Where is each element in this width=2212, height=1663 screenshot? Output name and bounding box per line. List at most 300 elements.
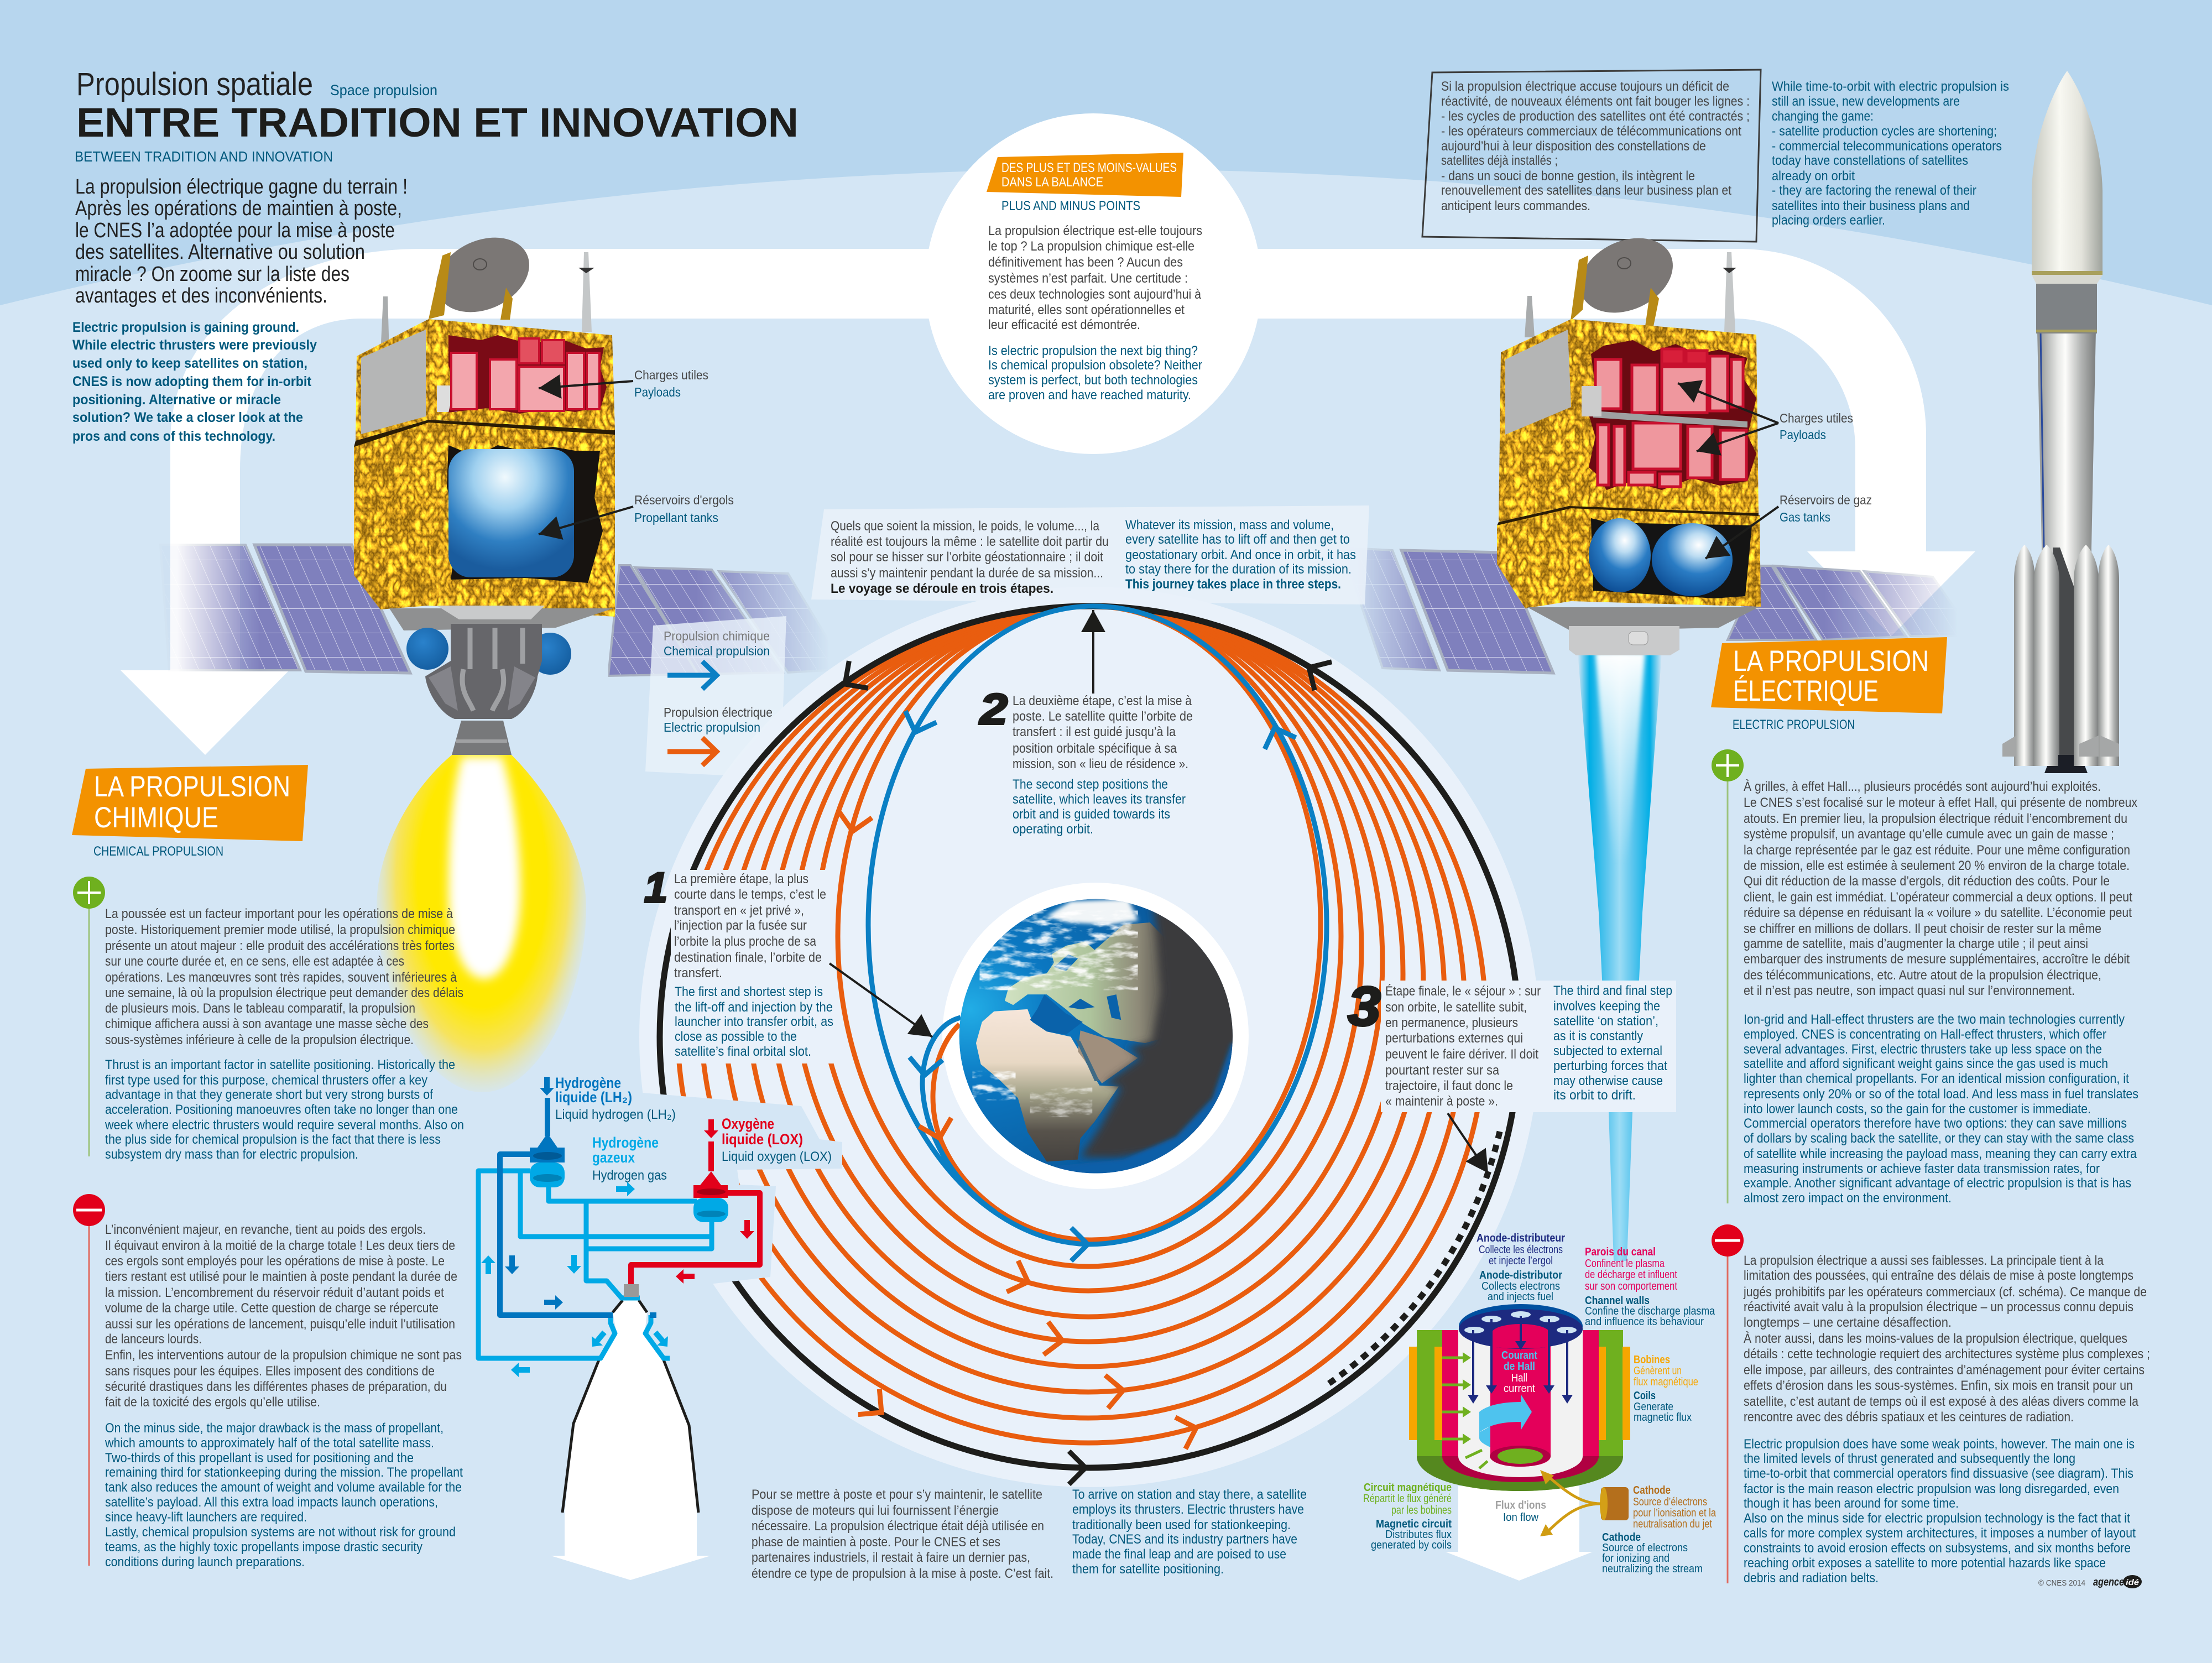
heading: title block: Space propulsion (330, 82, 437, 98)
label: electric satellite parts: Payloads (1780, 428, 1826, 442)
satellite dish (1568, 224, 1685, 327)
text: step 1: transport en « jet privé », (674, 903, 804, 918)
text: electric plus french: Qui dit réduction de la masse d’ergols, dit réduction des coûts. Pour le (1744, 874, 2110, 889)
magnetic flux arrows (1442, 1352, 1488, 1468)
legend arrow orange (667, 738, 717, 765)
icon: chemical minus (73, 1194, 105, 1566)
text: intro english (72, 320, 317, 444)
text: electric minus english: factor is the main reason electric propulsion was long disregarded, even (1744, 1482, 2119, 1497)
satellite antennas (380, 296, 389, 354)
ion flow white arrow (1446, 1486, 1593, 1581)
text: electric minus french: effets d’érosion dans les sous-systèmes. Enfin, six mois en transit pour un (1744, 1378, 2133, 1393)
text: intro french: des satellites. Alternative ou solution (75, 241, 365, 264)
text: orbit intro french: Le voyage se déroule en trois étapes. (831, 581, 1053, 596)
diagram: cryogenic engine feed schematic (478, 1075, 842, 1580)
night side (1081, 901, 1248, 1158)
geostationary orbit black (660, 606, 1519, 1468)
text: step 1: transfert. (674, 966, 722, 981)
label: hydrogen gas: gazeux (592, 1149, 635, 1166)
text: bottom french: Pour se mettre à poste et pour s’y maintenir, le satellite (752, 1487, 1042, 1502)
text: chemical plus french: sur une courte durée et, en ce sens, elle est adaptée à ces (105, 954, 404, 969)
chart: electric thruster plume (1578, 653, 1662, 1261)
text: bottom english: To arrive on station and stay there, a satellite (1072, 1487, 1307, 1502)
station-keeping dotted orbit (1328, 1132, 1500, 1384)
background: darker sky cap above the curve (0, 0, 2212, 305)
text: step 2: orbit and is guided towards its (1013, 807, 1170, 822)
label: chemical arrows (539, 381, 633, 534)
label: liquid oxygen: Oxygène (722, 1115, 774, 1132)
text: electric minus french: limitation des poussées, qui entraîne des délais de mise à poste longtemps (1744, 1268, 2133, 1283)
text: step 1: the lift-off and injection by the (675, 1000, 833, 1015)
label: chemical satellite parts (634, 368, 734, 525)
text: intro french: Après les opérations de maintien à poste, (75, 197, 402, 220)
label: channel walls: Parois du canal (1585, 1246, 1656, 1258)
heading: chemical propulsion banner: CHEMICAL PROPULSION (93, 844, 223, 859)
text: chemical minus english: teams, as the highly toxic propellants impose drastic security (105, 1540, 422, 1555)
satellite: chemical solar wings (160, 545, 846, 676)
label: cathode: pour l’ionisation et la (1633, 1507, 1717, 1519)
label: electric satellite parts (1780, 411, 1872, 524)
text: development english: today have constellations of satellites (1772, 153, 1968, 168)
grey radiator (361, 330, 426, 434)
text: step 1: satellite’s final orbital slot. (675, 1044, 811, 1059)
text: intro english: pros and cons of this technology. (72, 429, 275, 444)
label: anode distributor: and injects fuel (1488, 1291, 1553, 1303)
label: Hall current: Courant (1501, 1349, 1537, 1362)
text: orbit intro french: aussi s’y maintenir pendant la durée de sa mission... (831, 566, 1103, 581)
label: anode distributor (1477, 1232, 1565, 1303)
label: ion flow (1495, 1499, 1546, 1524)
label: chemical satellite parts: Propellant tanks (634, 510, 718, 525)
label: magnetic circuit: generated by coils (1371, 1539, 1452, 1551)
text: electric plus french: Le CNES s’est focalisé sur le moteur à effet Hall, qui présente de nombreux (1744, 795, 2137, 810)
label: channel walls: Channel walls (1585, 1295, 1650, 1307)
text: electric plus english: Commercial operators therefore have two options: they can save millions (1744, 1116, 2127, 1131)
text: electric plus french: réduire sa dépense en réduisant la « voilure » du satellite. L’économie peut (1744, 905, 2132, 920)
flow arrows (481, 1077, 754, 1377)
label: magnetic circuit: par les bobines (1391, 1504, 1452, 1516)
icon: chemical plus (73, 877, 105, 1156)
callout box: development french: aujourd’hui à leur disposition des constellations de (1441, 139, 1706, 154)
text: chemical minus english: Two-thirds of this propellant is used for positioning and the (105, 1451, 414, 1466)
text: chemical minus french: Il équivaut environ à la moitié de la charge totale ! Les deux tiers de (105, 1238, 455, 1253)
text: plus and minus english (988, 343, 1202, 403)
text: electric plus french: la charge représentée par le gaz est réduite. Pour une même configuration (1744, 843, 2130, 858)
label: cathode: Cathode (1602, 1531, 1641, 1544)
callout box: development french: réactivité, de nouveaux éléments ont fait bouger les lignes : (1441, 94, 1750, 109)
label: chemical satellite parts: Payloads (634, 385, 681, 399)
text: orbit intro english: This journey takes place in three steps. (1125, 577, 1341, 592)
scandinavia and europe and asia (1005, 922, 1167, 1043)
text: bottom english: them for satellite positioning. (1072, 1562, 1224, 1577)
text: step 1: destination finale, l’orbite de (674, 950, 822, 965)
text: electric minus english: time-to-orbit that commercial operators find dissuasive (see diagram). This (1744, 1466, 2133, 1481)
text: development english: - satellite production cycles are shortening; (1772, 124, 1997, 139)
channel interior (1458, 1330, 1583, 1477)
label: cathode: neutralisation du jet (1633, 1518, 1712, 1530)
gold upper bus (1499, 319, 1759, 522)
text: step 1: courte dans le temps, c’est le (674, 887, 826, 902)
text: intro english: While electric thrusters were previously (72, 337, 317, 353)
payload bay (1589, 340, 1756, 490)
oxygen turbopump (693, 1171, 728, 1222)
text: bottom english: traditionally been used for stationkeeping. (1072, 1518, 1291, 1532)
thruster base (1527, 607, 1759, 631)
panel: earth halo (942, 883, 1249, 1189)
heading: title block: BETWEEN TRADITION AND INNOVATION (75, 148, 333, 165)
text: orbit intro english (1125, 518, 1356, 592)
text: bottom french: dispose de moteurs qui lui fournissent l’énergie (752, 1503, 999, 1518)
text: step 3: may otherwise cause (1553, 1073, 1663, 1088)
gold upper bus (356, 319, 615, 441)
heading: title block (75, 66, 799, 165)
arrow: step 3 to dotted orbit (1448, 1113, 1488, 1173)
label: magnetic circuit: Circuit magnétique (1364, 1482, 1452, 1494)
propellant tank bay (447, 445, 603, 583)
text: intro french (75, 175, 408, 307)
text: intro french: avantages et des inconvénients. (75, 284, 327, 307)
text: chemical plus french: sous-systèmes inférieure à celle de la propulsion électrique. (105, 1033, 414, 1047)
label: channel walls: sur son comportement (1585, 1280, 1677, 1292)
text: step 2: The second step positions the (1013, 777, 1168, 792)
text: step 2: transfert : il est guidé jusqu’à la (1013, 724, 1176, 739)
heading: electric propulsion banner: LA PROPULSION (1733, 645, 1929, 677)
panel: orbit pale disc (639, 587, 1540, 1487)
text: electric minus french: longtemps – une certaine désaffection. (1744, 1315, 1952, 1330)
text: chemical plus english: the plus side for chemical propulsion is the fact that there is less (105, 1132, 441, 1147)
label: channel walls: and influence its behaviour (1585, 1316, 1704, 1328)
text: step 3: pourtant rester sur sa (1385, 1063, 1500, 1078)
label: coils: flux magnétique (1634, 1376, 1698, 1388)
text: bottom french: nécessaire. La propulsion électrique était déjà utilisée en (752, 1519, 1044, 1534)
label: liquid hydrogen: Liquid hydrogen (LH₂) (555, 1107, 676, 1122)
label: liquid oxygen: Liquid oxygen (LOX) (722, 1149, 832, 1164)
text: chemical plus english: subsystem dry mass than for electric propulsion. (105, 1147, 358, 1162)
text: development english (1772, 79, 2009, 228)
label: Hall current: Hall (1511, 1372, 1527, 1384)
credits: CNES and agency: © CNES 2014 (2038, 1578, 2085, 1588)
text: chemical minus french: la mission. L’encombrement du réservoir réduit d’autant poids et (105, 1285, 444, 1300)
text: plus and minus english: Is chemical propulsion obsolete? Neither (988, 358, 1202, 373)
label: chemical satellite parts: Charges utiles (634, 368, 708, 382)
shelf (1593, 411, 1747, 428)
text: plus and minus french: le top ? La propulsion chimique est-elle (988, 239, 1194, 254)
satellite: electric propulsion cutaway (1497, 224, 1761, 655)
panel: propulsion legend: Chemical propulsion (664, 644, 770, 658)
heading: chemical propulsion banner: LA PROPULSION (94, 770, 290, 803)
electric orbit ellipses (677, 606, 1486, 1443)
satellite: electric left wing (1342, 548, 1553, 673)
heading: title block: Propulsion spatiale (76, 66, 313, 102)
rocket boosters (2014, 545, 2035, 766)
liquid oxygen pipes (631, 1141, 760, 1293)
text: step 3: 3 (1348, 976, 1381, 1038)
icon: electric minus (1712, 1224, 1744, 1583)
text: electric plus french: et il n’est pas neutre, son impact quasi nul sur l’environnement. (1744, 983, 2075, 998)
text: chemical minus english: since heavy-lift launchers are required. (105, 1510, 307, 1525)
text: step 2: position orbitale spécifique à sa (1013, 741, 1177, 756)
Hall current curved arrow (1479, 1394, 1532, 1447)
text: electric plus french: atouts. En premier lieu, la propulsion électrique réduit l’encombrement du (1744, 811, 2127, 826)
text: plus and minus english: system is perfect, but both technologies (988, 373, 1198, 388)
text: electric plus english: example. Another significant advantage of electric propulsion is that is has (1744, 1176, 2131, 1191)
credits: CNES and agency (2038, 1575, 2142, 1588)
label: hydrogen gas: Hydrogen gas (592, 1168, 667, 1183)
baltic sea (1054, 954, 1078, 971)
text: chemical minus english: remaining third for stationkeeping during the mission. The propellant (105, 1465, 463, 1480)
arctic snow (1047, 899, 1138, 925)
text: electric minus french: La propulsion électrique a aussi ses faiblesses. La principale tient à la (1744, 1253, 2104, 1268)
panel: step 3 text background (1381, 981, 1676, 1112)
text: electric plus english: almost zero impact on the environment. (1744, 1191, 1952, 1206)
text: development english: already on orbit (1772, 169, 1855, 184)
label: channel walls: de décharge et influent (1585, 1269, 1677, 1281)
label: Hall current: de Hall (1504, 1360, 1535, 1373)
text: chemical plus french: de plusieurs mois. Dans le tableau comparatif, la propulsion (105, 1001, 415, 1016)
text: chemical minus french: L’inconvénient majeur, en revanche, tient au poids des ergols. (105, 1222, 426, 1237)
engine nozzle (452, 721, 512, 755)
icon: earth globe (959, 899, 1248, 1179)
text: intro french: le CNES l’a adoptée pour la mise à poste (75, 219, 395, 242)
text: chemical plus french: chimique affichera aussi à son avantage une masse sèche des (105, 1016, 429, 1031)
label: coils: Bobines (1634, 1354, 1670, 1366)
label: coils: Generate (1634, 1401, 1673, 1413)
text: step 3: as it is constantly (1553, 1029, 1643, 1044)
text: electric plus english: several advantages. First, electric thrusters take up less space on the (1744, 1042, 2102, 1057)
satellite: electric right wing (1728, 566, 1974, 640)
text: chemical minus english: satellite’s payload. All this extra load impacts launch operations, (105, 1495, 438, 1510)
text: electric minus french: elle impose, par ailleurs, des contraintes d’aménagement pour éviter certains (1744, 1363, 2145, 1378)
panel: plus and minus circle (925, 113, 1261, 454)
callout box: development french: Si la propulsion électrique accuse toujours un déficit de (1441, 79, 1729, 94)
text: orbit intro english: every satellite has to lift off and then get to (1125, 532, 1350, 547)
text: chemical minus french: aussi sur les opérations de lancement, puisqu’elle induit l’utilisation (105, 1317, 455, 1332)
text: development english: - they are factoring the renewal of their (1772, 183, 1976, 198)
text: step 2: poste. Le satellite quitte l’orbite de (1013, 709, 1193, 724)
satellite dish (424, 223, 541, 326)
text: electric plus english: lighter than chemical propellants. For an identical mission configuration, it (1744, 1071, 2129, 1086)
bus junction (354, 420, 615, 447)
text: development english: - commercial telecommunications operators (1772, 139, 2002, 154)
text: orbit intro french: Quels que soient la mission, le poids, le volume..., la (831, 519, 1100, 534)
text: plus and minus french: systèmes n’est parfait. Une certitude : (988, 271, 1188, 286)
text: plus and minus french: définitivement has been ? Aucun des (988, 255, 1183, 270)
text: orbit intro french (831, 519, 1109, 596)
credits: CNES and agency: idé (2126, 1578, 2139, 1587)
subtitle: plus and minus points: PLUS AND MINUS POINTS (1001, 199, 1140, 213)
big white flow arrow linking chemical and electric sections (121, 249, 1975, 755)
hydrogen turbopump (530, 1133, 565, 1187)
label: payloads arrows electric (1678, 383, 1778, 559)
banner: plus and minus: DANS LA BALANCE (1001, 175, 1103, 190)
text: electric minus french (1743, 1253, 2150, 1425)
text: plus and minus english: Is electric propulsion the next big thing? (988, 343, 1198, 358)
text: intro english: Electric propulsion is gaining ground. (72, 320, 299, 335)
text: intro english: positioning. Alternative or miracle (72, 392, 281, 408)
text: electric minus french: réactivité avait valu à la propulsion électrique – un processus connu depuis (1744, 1300, 2133, 1315)
label: magnetic circuit: Magnetic circuit (1376, 1518, 1452, 1530)
red sea (1076, 1039, 1099, 1081)
label: cathode: for ionizing and (1602, 1552, 1670, 1565)
label: magnetic circuit: Répartit le flux généré (1363, 1493, 1452, 1505)
text: electric plus french: client, le gain est immédiat. L’opérateur commercial a deux options. Il peut (1744, 890, 2132, 905)
panel: step 1 text background (671, 870, 833, 1064)
text: chemical plus english: week where electric thrusters would require several months. Also on (105, 1118, 464, 1133)
label: hydrogen gas: Hydrogène (592, 1134, 659, 1151)
panel: propulsion legend: Propulsion électrique (664, 705, 773, 720)
chemical orbit blue (868, 606, 1327, 1244)
label: liquid hydrogen (555, 1075, 676, 1122)
grey radiator (1505, 330, 1571, 435)
payload blocks (451, 338, 599, 411)
label: channel walls (1585, 1246, 1715, 1328)
text: step 3: subjected to external (1553, 1044, 1662, 1059)
small spheres (406, 628, 448, 670)
panel: electric orbit transfer spiral (660, 606, 1519, 1484)
text: step 2: satellite, which leaves its transfer (1013, 792, 1186, 807)
text: electric plus english: Ion-grid and Hall-effect thrusters are the two main technologies currently (1744, 1012, 2125, 1027)
text: chemical plus french: opérations. Les manœuvres sont très rapides, souvent inférieures à (105, 970, 457, 985)
callout box: development french: anticipent leurs commandes. (1441, 199, 1590, 213)
atlantic clouds (972, 1071, 1015, 1100)
text: electric plus french: À grilles, à effet Hall..., plusieurs procédés sont aujourd’hui exploités. (1744, 779, 2101, 794)
text: plus and minus english: are proven and have reached maturity. (988, 388, 1191, 403)
arrow: step 2 to apogee (1092, 610, 1094, 694)
heading: chemical propulsion banner (72, 765, 308, 859)
text: electric minus english: Also on the minus side for electric propulsion technology is the fact that it (1744, 1511, 2130, 1526)
northern clouds (979, 910, 1138, 990)
text: chemical plus french: présente un atout majeur : elle produit des accélérations très fortes (105, 939, 455, 953)
rocket central body (2037, 330, 2096, 719)
text: step 3: peuvent le faire dériver. Il doit (1385, 1047, 1538, 1062)
legend arrow blue (667, 661, 717, 689)
text: intro english: solution? We take a closer look at the (72, 410, 303, 425)
label: chemical satellite parts: Réservoirs d'ergols (634, 493, 734, 507)
callout box: development french: - dans un souci de bonne gestion, ils intègrent le (1441, 169, 1695, 184)
africa (976, 1009, 1119, 1161)
text: plus and minus french: ces deux technologies sont aujourd’hui à (988, 287, 1202, 302)
text: electric minus english: reaching orbit exposes a satellite to more potential hazards like space (1744, 1556, 2106, 1571)
label: anode distributor: Collecte les électrons (1479, 1244, 1563, 1256)
text: electric plus french: des télécommunications, etc. Autre atout de la propulsion électrique, (1744, 968, 2101, 983)
text: electric minus french: jugés prohibitifs par les opérateurs commerciaux (cf. schéma). Ce manque de (1743, 1285, 2147, 1300)
text: chemical plus english: Thrust is an important factor in satellite positioning. Historically the (105, 1057, 455, 1072)
label: Hall current: current (1504, 1383, 1535, 1395)
engine base plate (389, 608, 613, 630)
text: chemical plus english: advantage in that they generate short but very strong bursts of (105, 1087, 433, 1102)
text: bottom french: partenaires industriels, il restait à faire un dernier pas, (752, 1550, 1030, 1565)
anode distributor disc (1459, 1304, 1583, 1348)
label: ion flow: Ion flow (1503, 1511, 1539, 1524)
orbit direction chevrons (836, 812, 1201, 1449)
text: step 3: perturbations externes qui (1385, 1031, 1523, 1046)
text: chemical minus french: fait de la toxicité des ergols qu’elle utilise. (105, 1395, 320, 1410)
text: electric plus english: represents only 20% or so of the total load. And less mass in fuel translates (1744, 1087, 2138, 1102)
text: chemical minus english: conditions during launch preparations. (105, 1555, 305, 1570)
text: step 2: La deuxième étape, c’est la mise à (1013, 694, 1192, 708)
text: electric plus french (1744, 779, 2137, 998)
text: intro french: miracle ? On zoome sur la liste des (75, 263, 349, 286)
text: step 1: 1 (644, 864, 667, 911)
label: cathode: Cathode (1633, 1484, 1671, 1497)
text: electric plus french: se chiffrer en millions de dollars. Il peut choisir de rester sur la même (1744, 921, 2101, 936)
arrow: step 1 to launch (830, 963, 932, 1037)
text: chemical minus french: de lanceurs lourds. (105, 1332, 202, 1347)
text: chemical minus french: volume de la charge utile. Cette question de charge se répercute (105, 1301, 439, 1316)
callout box: development french: renouvellement des satellites dans leur business plan et (1441, 183, 1731, 198)
label: anode distributor: Anode-distributeur (1477, 1232, 1565, 1244)
text: development english: While time-to-orbit with electric propulsion is (1772, 79, 2009, 94)
electron arrows (1468, 1316, 1573, 1404)
text: step 2: mission, son « lieu de résidence ». (1013, 757, 1188, 771)
coils (1409, 1347, 1630, 1440)
credits: CNES and agency: agence (2093, 1576, 2124, 1588)
text: plus and minus french (988, 223, 1202, 332)
text: bottom english: made the final leap and are poised to use (1072, 1547, 1286, 1562)
chart: chemical engine flame (377, 755, 586, 1092)
text: orbit intro french: sol pour se hisser sur l’orbite géostationnaire ; il doit (831, 550, 1103, 565)
label: anode distributor: Anode-distributor (1479, 1269, 1562, 1281)
text: chemical plus french: poste. Historiquement premier mode utilisé, la propulsion chimique (105, 922, 455, 937)
payload bay (448, 335, 607, 414)
callout box: development french: - les cycles de production des satellites ont été contractés ; (1441, 109, 1750, 124)
text: electric minus english: the limited levels of thrust generated and subsequently the long (1744, 1451, 2075, 1466)
text: step 3: son orbite, le satellite subit, (1385, 1000, 1527, 1015)
heading: title block: ENTRE TRADITION ET INNOVATION (76, 100, 799, 145)
payload blocks (1595, 349, 1746, 487)
text: step 3: « maintenir à poste ». (1385, 1094, 1498, 1109)
text: chemical minus english: tank also reduces the amount of weight and volume available for the (105, 1480, 462, 1495)
text: electric plus english: employed. CNES is concentrating on Hall-effect thrusters, which offer (1744, 1027, 2106, 1042)
text: chemical minus french: sans risques pour les équipes. Elles imposent des conditions de (105, 1364, 435, 1379)
text: intro english: used only to keep satellites on station, (72, 356, 307, 371)
label: liquid hydrogen: Hydrogène (555, 1075, 621, 1091)
label: magnetic circuit (1363, 1482, 1452, 1551)
label: ion flow: Flux d'ions (1495, 1499, 1546, 1511)
engine cluster (425, 624, 542, 719)
text: electric plus french: système propulsif, un avantage qu’elle cumule avec un gain de masse ; (1744, 827, 2114, 842)
text: chemical minus french: tiers restant est utilisé pour le maintien à poste pendant la durée de (105, 1269, 457, 1284)
gas tank bay (1591, 518, 1752, 598)
label: electric satellite parts: Réservoirs de gaz (1780, 493, 1872, 507)
text: step 2: operating orbit. (1013, 822, 1093, 837)
text: electric plus english: of satellite while increasing the payload mass, meaning they can carry extra (1744, 1146, 2137, 1161)
text: step 3: en permanence, plusieurs (1385, 1015, 1518, 1030)
cathode (1540, 1470, 1629, 1536)
text: chemical plus english (105, 1057, 464, 1162)
text: step 1: La première étape, la plus (674, 872, 808, 887)
label: cathode: Source d’électrons (1633, 1496, 1707, 1508)
channel walls pink (1442, 1330, 1599, 1482)
text: development english: satellites into their business plans and (1772, 199, 1970, 213)
text: bottom english: Today, CNES and its industry partners have (1072, 1532, 1297, 1547)
text: bottom french (752, 1487, 1053, 1581)
satellite antennas (1525, 296, 1535, 337)
rocket dark core (2053, 548, 2074, 763)
label: liquid oxygen: liquide (LOX) (722, 1131, 803, 1148)
label: cathode: neutralizing the stream (1602, 1563, 1703, 1575)
text: chemical minus french (105, 1222, 462, 1410)
heading: electric propulsion banner (1711, 637, 1947, 732)
banner: plus and minus: DES PLUS ET DES MOINS-VALUES (1001, 160, 1177, 175)
rocket fairing (2032, 71, 2103, 271)
text: electric minus french: À noter aussi, dans les moins-values de la propulsion électrique, quelques (1744, 1331, 2127, 1346)
text: step 2 (979, 685, 1193, 837)
text: development english: placing orders earlier. (1772, 213, 1885, 228)
icon: electric plus (1712, 749, 1744, 1203)
text: electric minus english: calls for more complex system architectures, it imposes a number of layout (1744, 1526, 2136, 1541)
label: coils: magnetic flux (1634, 1411, 1692, 1424)
